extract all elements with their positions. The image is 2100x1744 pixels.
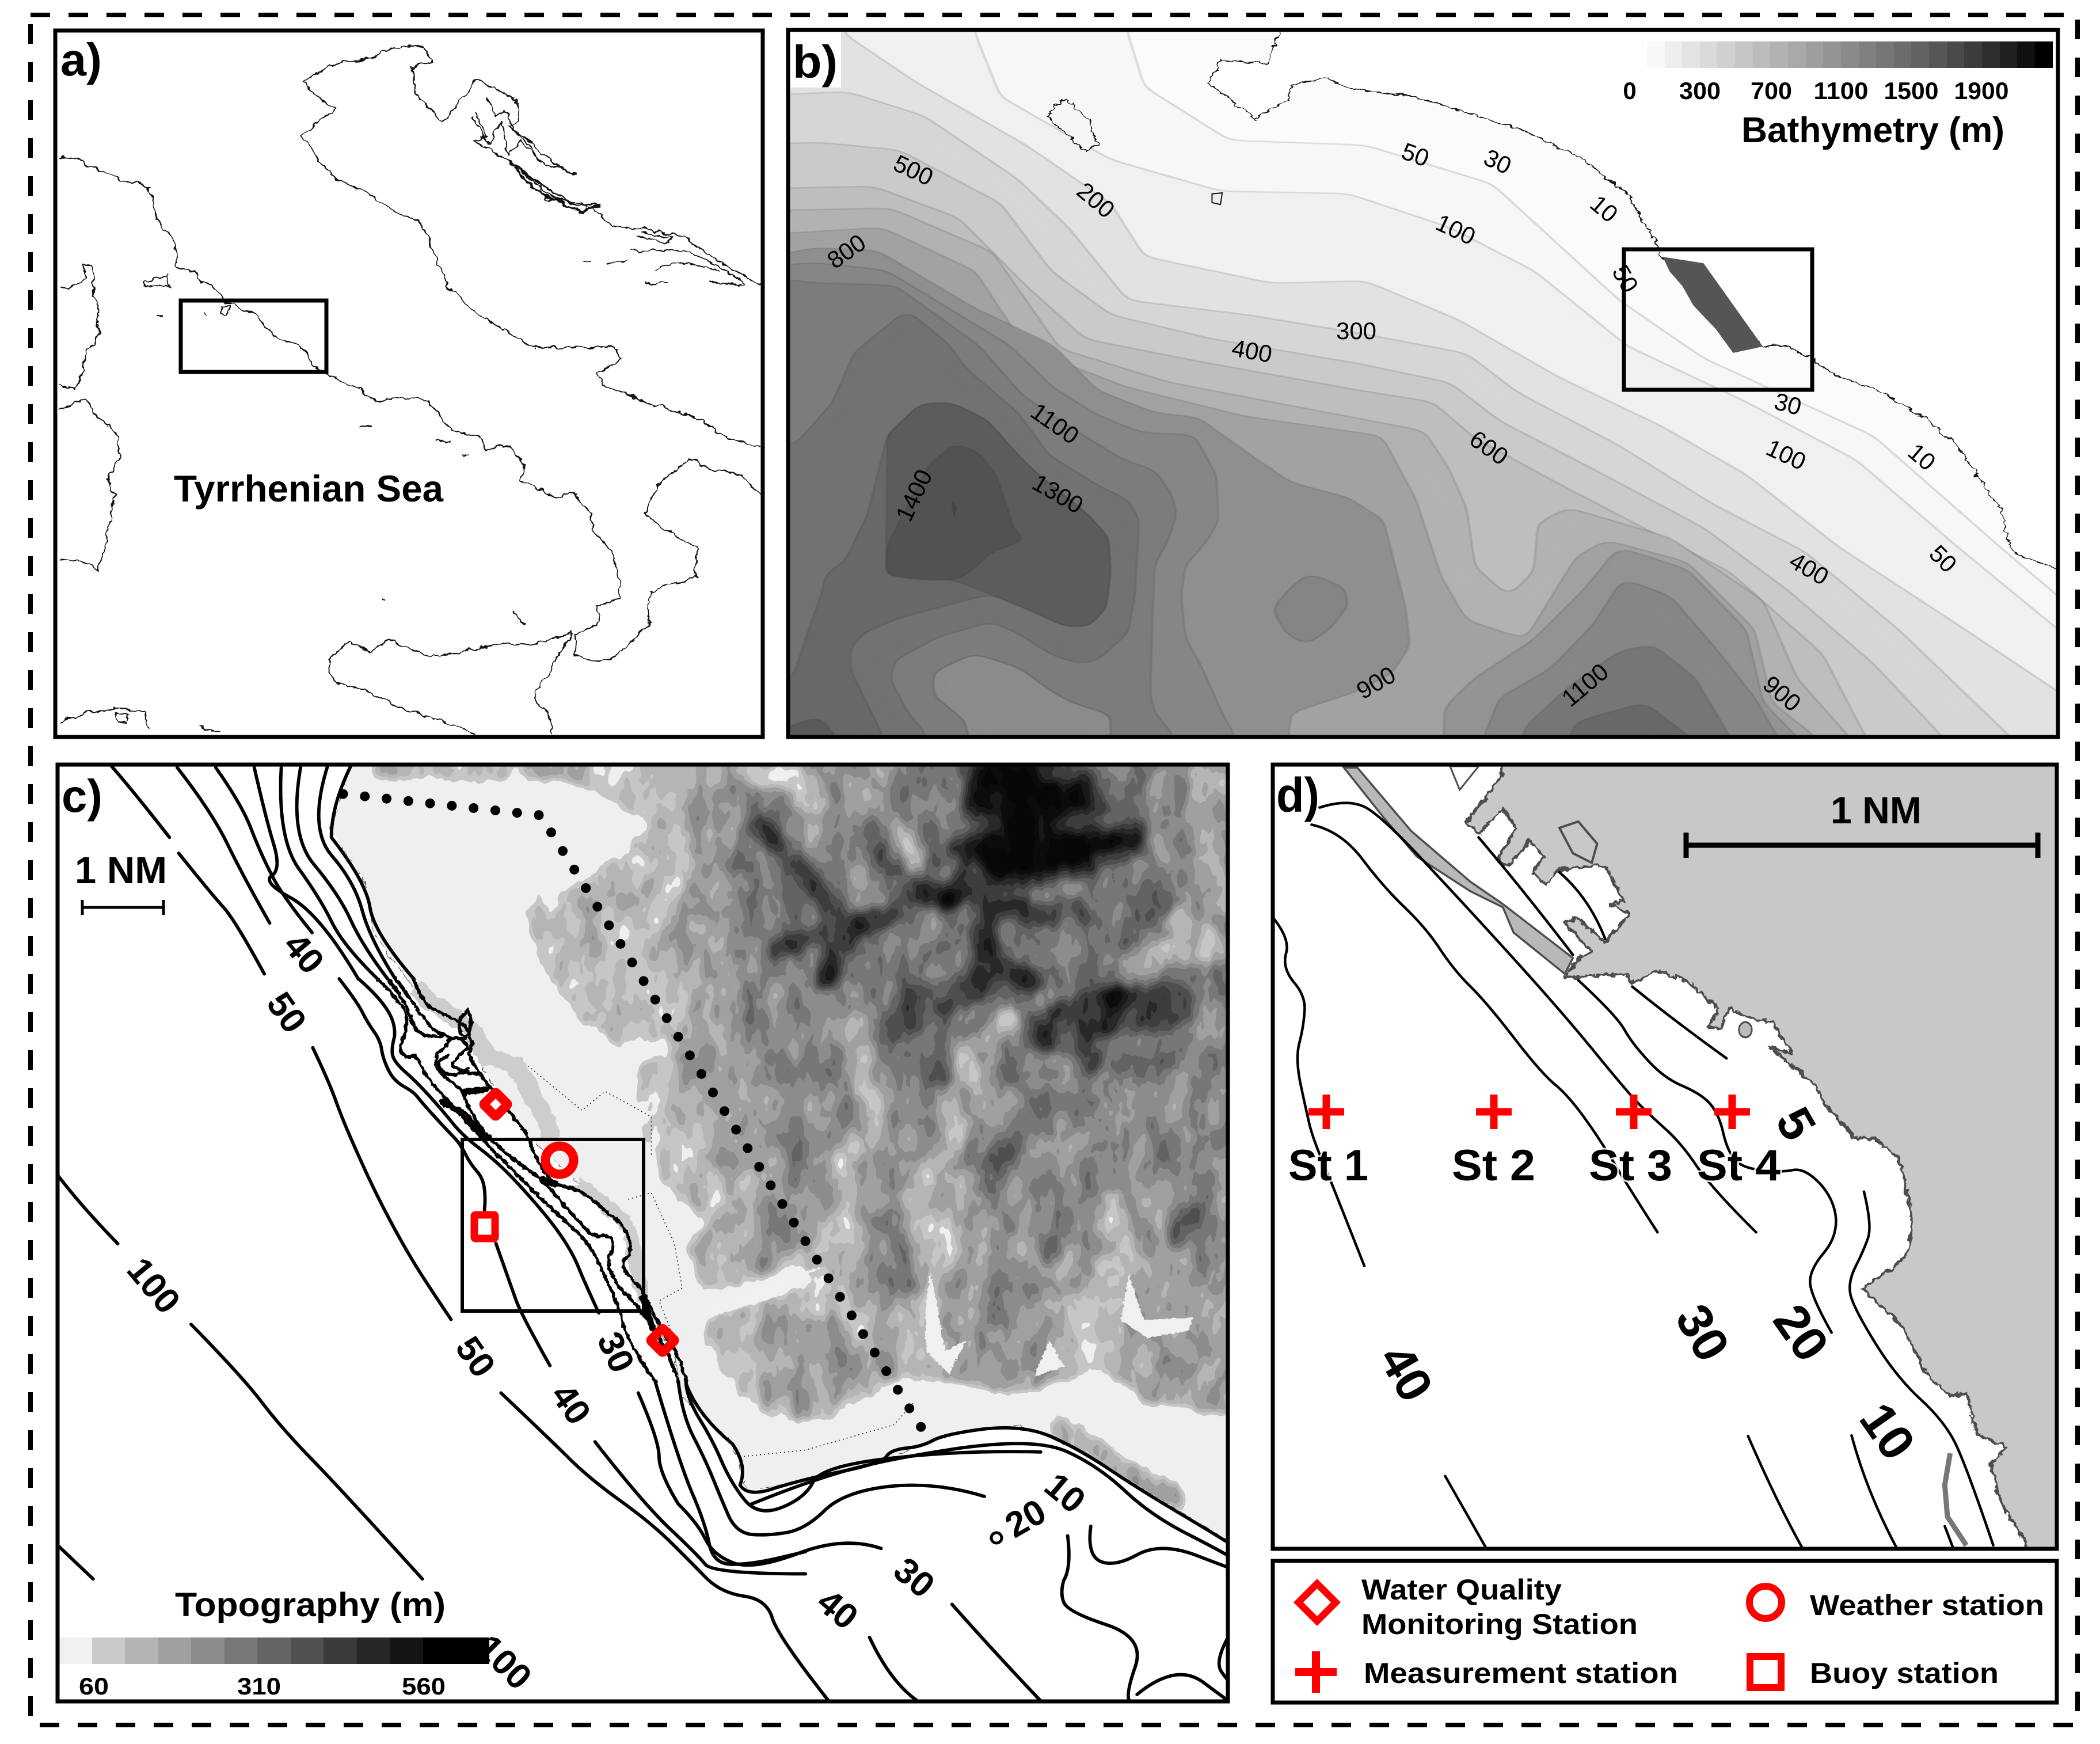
land base	[332, 736, 1268, 1545]
c contour labels: 50	[258, 985, 314, 1040]
lower right deep basin	[1443, 550, 1797, 735]
icon: measurement cross	[1295, 1651, 1337, 1693]
b contour labels: 100	[1762, 434, 1810, 476]
breakwater	[1344, 767, 1573, 974]
b contour labels: 10	[1585, 189, 1623, 227]
panel b: bathymetry map	[786, 28, 2060, 739]
b contour labels: 800	[822, 229, 871, 274]
scale bar c: 1 NM	[75, 849, 167, 891]
buoy label: Buoy station	[1810, 1657, 1999, 1689]
icon: weather circle	[1749, 1586, 1782, 1618]
b contour labels: 30	[1480, 143, 1516, 180]
c contour labels: 100	[469, 1627, 539, 1697]
panel d: station detail map	[1273, 736, 2100, 1574]
watershed dotted boundary	[343, 794, 923, 1431]
bathymetry legend: 1100	[1813, 77, 1869, 104]
c contour labels: 20	[999, 1491, 1053, 1546]
valleys upper	[747, 772, 811, 803]
bathymetry legend: 1900	[1954, 77, 2009, 104]
c contour labels: 100	[119, 1250, 188, 1321]
inset box	[181, 301, 326, 372]
lagoon channel	[1945, 1453, 1966, 1545]
bathymetry legend: Bathymetry (m)	[1741, 111, 2004, 150]
b contour labels: 900	[1352, 661, 1400, 704]
islet	[1212, 193, 1222, 204]
monitoring label: Monitoring Station	[1361, 1608, 1638, 1640]
topography legend: 560	[402, 1673, 446, 1700]
coastlines	[59, 46, 760, 734]
inset box c	[462, 1139, 644, 1311]
measurement stations	[1288, 1095, 1781, 1190]
b contour labels: 300	[1336, 317, 1376, 344]
b contour labels: 30	[1771, 387, 1804, 420]
b contour labels: 200	[1072, 177, 1120, 223]
d contour labels: 10	[1849, 1393, 1926, 1470]
measurement stations: St 2	[1452, 1141, 1535, 1190]
b contour labels: 1100	[1026, 397, 1084, 450]
panel c: topography map	[58, 710, 1307, 1707]
icon: buoy square	[1750, 1656, 1781, 1688]
d contour labels: 30	[1665, 1295, 1740, 1370]
b contour labels: 400	[1230, 334, 1274, 368]
label b: b)	[793, 36, 838, 88]
b contour labels: 100	[1432, 208, 1479, 250]
island	[1047, 100, 1098, 150]
measurement stations: St 3	[1589, 1141, 1672, 1190]
valleys lower	[815, 1094, 875, 1263]
b contour labels: 50	[1398, 138, 1433, 172]
depth contours d	[1274, 803, 1994, 1547]
b contour labels: 400	[1785, 547, 1833, 590]
c contour labels: 40	[276, 926, 332, 982]
c contour labels: 40	[809, 1582, 865, 1637]
topography legend	[59, 1586, 489, 1700]
legend panel	[1273, 1561, 2057, 1703]
topography legend: Topography (m)	[175, 1586, 446, 1624]
depth contours	[58, 766, 1237, 1707]
mid-elevation massif	[728, 753, 1193, 1085]
basin	[1559, 822, 1597, 862]
bathymetry legend	[1623, 41, 2053, 150]
measurement label: Measurement station	[1364, 1657, 1678, 1689]
b contour labels: 1300	[1028, 469, 1088, 519]
coastal lowland band	[416, 986, 553, 1138]
frame c	[58, 765, 1228, 1701]
lower ridges	[992, 1138, 1023, 1184]
main summit	[973, 772, 1144, 871]
b contour labels: 50	[1607, 260, 1644, 297]
scale bar d	[1686, 789, 2038, 858]
frame a	[55, 31, 763, 737]
deep basin bands	[701, 248, 1410, 770]
b contour labels: 1400	[891, 465, 938, 526]
b contour labels	[822, 138, 1962, 717]
b contour labels: 50	[1924, 539, 1962, 578]
topography legend: 310	[237, 1673, 281, 1700]
dock strip	[1450, 766, 1479, 790]
land and coast	[1208, 0, 2100, 606]
small depth ring	[991, 1533, 1002, 1543]
label a: a)	[60, 34, 102, 85]
topography legend: 60	[79, 1673, 109, 1700]
measurement stations: St 1	[1288, 1141, 1368, 1190]
scale bar c	[75, 849, 167, 915]
frame d	[1273, 765, 2057, 1549]
inset box b	[1624, 249, 1812, 390]
c contour labels: 30	[886, 1550, 942, 1606]
b contour labels: 600	[1464, 425, 1513, 470]
ridges	[906, 865, 1011, 898]
administrative boundary	[528, 1066, 651, 1155]
bathymetry filled contours	[790, 32, 2056, 735]
small pond	[1739, 1022, 1752, 1038]
study area polygon	[1663, 257, 1763, 353]
bathymetry legend: 300	[1679, 77, 1721, 104]
b contour labels: 10	[1903, 438, 1941, 476]
panel a: location map	[55, 31, 763, 737]
c contour labels: 40	[543, 1377, 599, 1432]
b contour labels: 900	[1758, 670, 1806, 717]
bathymetry legend: 1500	[1884, 77, 1939, 104]
d contour labels: 40	[1368, 1336, 1444, 1411]
c contour labels: 30	[589, 1326, 642, 1379]
river valleys	[701, 1266, 826, 1317]
bathymetry legend: 700	[1751, 77, 1792, 104]
b contour labels: 500	[889, 149, 937, 191]
d contour labels	[1368, 1098, 1926, 1470]
topography bands	[266, 710, 1307, 1612]
lowlands	[656, 1325, 1238, 1556]
station markers	[474, 1092, 675, 1352]
scale bar d: 1 NM	[1831, 789, 1922, 831]
sea name: Tyrrhenian Sea	[174, 468, 444, 510]
icon: water quality diamond	[1298, 1583, 1336, 1621]
b contour labels: 1100	[1557, 658, 1614, 712]
label d: d)	[1276, 768, 1319, 822]
weather label: Weather station	[1810, 1589, 2044, 1621]
measurement stations: St 4	[1697, 1141, 1781, 1190]
label c: c)	[62, 770, 102, 822]
coastal lowland band south	[578, 1182, 645, 1300]
c contour labels: 10	[1037, 1465, 1093, 1521]
c contour labels: 50	[447, 1329, 503, 1385]
d contour labels: 20	[1763, 1294, 1839, 1371]
bathymetry legend: 0	[1623, 77, 1637, 104]
c contour labels	[119, 926, 1093, 1697]
land	[1466, 736, 2100, 1574]
frame b	[788, 30, 2058, 737]
water quality label: Water Quality	[1361, 1574, 1562, 1606]
d contour labels: 5	[1765, 1098, 1827, 1150]
